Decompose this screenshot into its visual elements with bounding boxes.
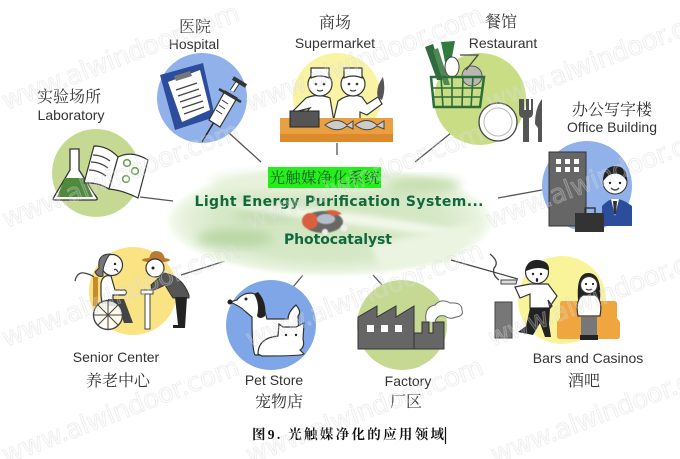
label: restaurant <box>469 13 537 51</box>
connector lines <box>140 133 542 287</box>
central ellipse: light energy purification system <box>168 166 492 276</box>
label: hospital <box>169 18 219 52</box>
icon: smoke <box>426 301 462 322</box>
icon: seated woman <box>577 273 601 340</box>
label: laboratory <box>37 88 104 123</box>
label: bars and casinos: Bars and Casinos <box>533 350 643 366</box>
label: senior center <box>73 349 160 390</box>
label: factory <box>385 373 431 411</box>
icon: chefs <box>291 68 384 122</box>
watermarks: www.alwindoor.com <box>0 116 244 235</box>
label: bars and casinos: 酒吧 <box>568 372 600 390</box>
watermarks: www.alwindoor.com <box>242 0 488 119</box>
label: restaurant: 餐馆 <box>485 13 517 31</box>
label: supermarket: Supermarket <box>295 35 375 51</box>
label: laboratory: Laboratory <box>38 107 104 123</box>
icon: smoking man <box>451 254 557 337</box>
icon: clipboard <box>160 63 215 130</box>
watermarks: www.alwindoor.com <box>242 236 488 355</box>
icon: briefcase <box>575 208 604 232</box>
panel: office building <box>542 101 657 232</box>
label: restaurant: Restaurant <box>469 35 537 51</box>
caption: 图9. 光触媒净化的应用领域 <box>252 426 444 442</box>
label: hospital: 医院 <box>179 18 211 36</box>
icon: grocery basket <box>425 41 484 107</box>
panel: hospital <box>157 18 247 143</box>
icon: sofa <box>557 301 620 339</box>
icon: dog <box>228 292 300 355</box>
label: laboratory: 实验场所 <box>37 88 101 106</box>
panel: supermarket <box>280 14 393 142</box>
icon: cigarette machine <box>495 302 512 338</box>
panel: bars and casinos <box>451 254 643 390</box>
label: light energy purification system: Light Energy Purification System... <box>194 194 484 210</box>
icon: syringe <box>202 78 246 142</box>
label: bars and casinos <box>533 350 643 390</box>
icon: flask <box>53 149 97 200</box>
watermarks: www.alwindoor.com <box>0 235 244 354</box>
panel: laboratory <box>37 88 148 217</box>
label: chinese highlighted title: 光触媒净化系统 <box>270 169 380 187</box>
label: pet store <box>245 372 303 411</box>
icon: ladybug <box>302 210 348 235</box>
text cursor <box>444 427 446 444</box>
panel: factory <box>357 280 462 411</box>
label: hospital: Hospital <box>169 36 219 52</box>
label: supermarket: 商场 <box>319 14 351 32</box>
label: photocatalyst: Photocatalyst <box>284 232 392 248</box>
panel: senior center <box>73 247 189 390</box>
label: supermarket <box>295 14 375 51</box>
label: senior center: Senior Center <box>73 349 160 365</box>
watermarks: www.alwindoor.com <box>0 0 244 117</box>
label: factory: Factory <box>385 373 431 389</box>
panel: pet store <box>226 280 316 411</box>
label: pet store: 宠物店 <box>255 393 303 411</box>
label: factory: 厂区 <box>390 393 422 411</box>
label: pet store: Pet Store <box>245 372 303 388</box>
watermarks: www.alwindoor.com <box>242 118 488 237</box>
icon: wheelchair user <box>75 254 133 330</box>
icon: building <box>549 152 586 226</box>
icon: open book <box>84 146 148 198</box>
label: office building <box>567 101 657 135</box>
label: office building: Office Building <box>567 119 657 135</box>
icon: counter with fish <box>280 111 393 142</box>
label: office building: 办公写字楼 <box>572 101 653 119</box>
icon: cat <box>258 323 304 356</box>
icon: elderly man with cane <box>141 251 189 329</box>
icon: plate and cutlery <box>479 99 542 142</box>
icon: businessman <box>602 166 632 226</box>
label: senior center: 养老中心 <box>86 372 151 390</box>
icon: factory <box>358 306 444 349</box>
panel: restaurant <box>425 13 542 145</box>
